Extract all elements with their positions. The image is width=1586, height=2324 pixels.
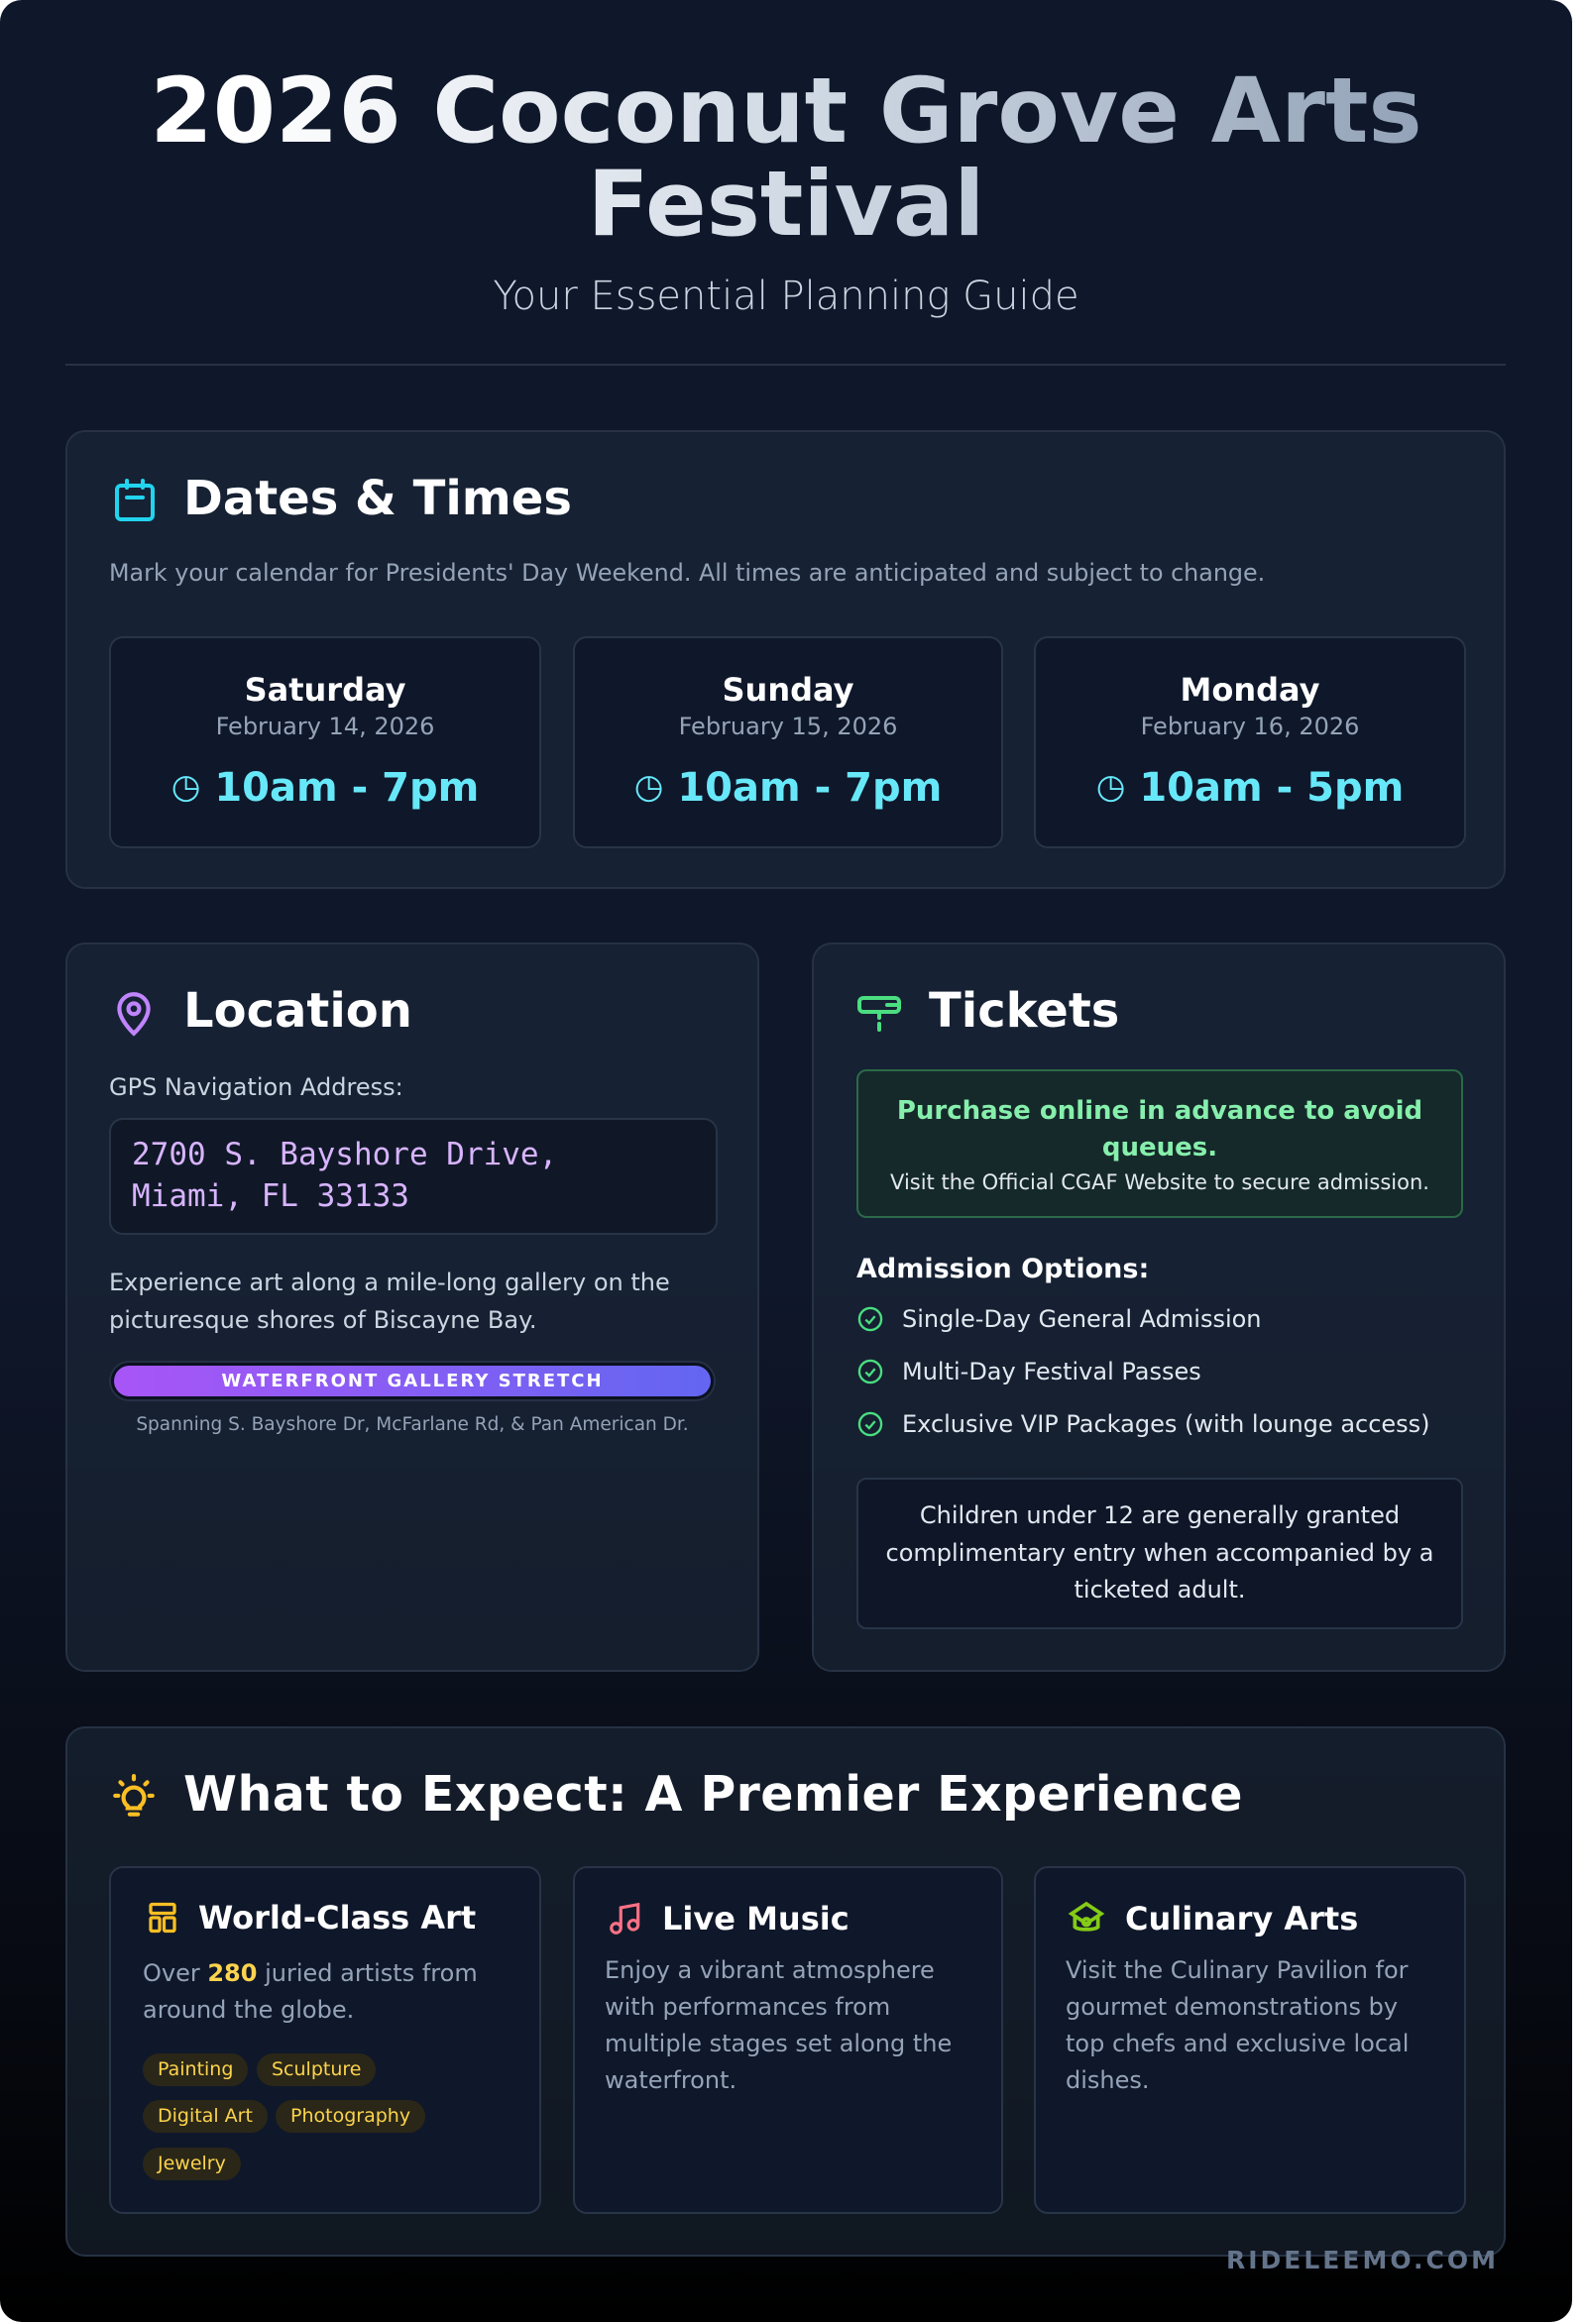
note: children	[856, 1478, 1463, 1629]
description: Experience art along a mile-long gallery on the picturesque shores of Biscayne Bay.	[109, 1269, 670, 1334]
day card: saturday: Saturday	[245, 671, 405, 709]
list item 3: Exclusive VIP Packages (with lounge access)	[902, 1410, 1430, 1438]
list item 1: Single-Day General Admission	[902, 1305, 1262, 1333]
heading: What to Expect: A Premier Experience	[183, 1766, 1243, 1823]
subheading: admission options: Admission Options:	[856, 1254, 1149, 1284]
address box: Miami, FL 33133	[132, 1178, 409, 1214]
day card: monday: February 16, 2026	[1141, 713, 1359, 740]
heading: Tickets	[929, 983, 1119, 1039]
address box	[109, 1118, 718, 1235]
card: world-class art: Jewelry	[158, 2153, 226, 2174]
panel: tickets	[812, 942, 1506, 1672]
card: world-class art: Over 280 juried artists from around the globe.	[143, 1959, 478, 2024]
card: world-class art: Sculpture	[272, 2058, 361, 2080]
caption: Spanning S. Bayshore Dr, McFarlane Rd, & Pan American Dr.	[136, 1414, 689, 1435]
day card: monday	[1034, 636, 1466, 848]
note: children: Children under 12 are generally granted complimentary entry when accompanied by a ticketed adult.	[886, 1501, 1433, 1604]
icon: ticket sign	[857, 996, 901, 1032]
callout: purchase online: Purchase online in advance to avoid queues.	[897, 1096, 1422, 1162]
watermark: RIDELEEMO.COM	[1226, 2246, 1499, 2274]
address box: 2700 S. Bayshore Drive,	[132, 1137, 557, 1172]
card: live music: Live Music	[662, 1900, 850, 1937]
heading: Dates & Times	[183, 471, 572, 526]
card: world-class art: Photography	[290, 2105, 410, 2127]
title: 2026 Coconut Grove Arts	[150, 59, 1422, 164]
day card: saturday: February 14, 2026	[216, 713, 434, 740]
day card: sunday: ◷ 10am - 7pm	[634, 765, 942, 811]
icon: calendar	[115, 479, 155, 521]
day card: sunday	[573, 636, 1003, 848]
day card: monday: ◷ 10am - 5pm	[1096, 765, 1404, 811]
title	[0, 65, 1572, 252]
tags: Painting	[158, 2058, 233, 2080]
subtitle: Your Essential Planning Guide	[493, 274, 1079, 319]
day card: sunday: February 15, 2026	[679, 713, 897, 740]
card: culinary arts: Culinary Arts	[1125, 1900, 1358, 1937]
description: Mark your calendar for Presidents' Day Weekend. All times are anticipated and subject to change.	[109, 559, 1265, 587]
day card: saturday	[109, 636, 541, 848]
list item 2: Multi-Day Festival Passes	[902, 1358, 1201, 1385]
panel: location	[65, 942, 759, 1672]
bar: waterfront gallery stretch: WATERFRONT GALLERY STRETCH	[221, 1371, 604, 1391]
card: world-class art: Digital Art	[158, 2105, 253, 2127]
panel: dates & times	[65, 430, 1506, 889]
title: Festival	[588, 153, 984, 257]
card: culinary arts	[1034, 1866, 1466, 2214]
card: live music: Enjoy a vibrant atmosphere with performances from multiple stages set along the waterfront.	[605, 1956, 952, 2094]
tags	[143, 2053, 248, 2086]
icon: bulb	[113, 1774, 155, 1817]
panel: what to expect	[65, 1726, 1506, 2257]
card: world-class art	[109, 1866, 541, 2214]
day card: sunday: Sunday	[722, 671, 853, 709]
callout: purchase online: Visit the Official CGAF Website to secure admission.	[890, 1170, 1429, 1194]
icon: pin	[117, 992, 151, 1037]
day card: monday: Monday	[1180, 671, 1319, 709]
bar: waterfront gallery stretch	[109, 1361, 716, 1401]
label: GPS Navigation Address:	[109, 1073, 403, 1101]
card heading: World-Class Art	[198, 1899, 476, 1937]
card: live music	[573, 1866, 1003, 2214]
day card: saturday: ◷ 10am - 7pm	[171, 765, 479, 811]
card: culinary arts: Visit the Culinary Pavilion for gourmet demonstrations by top chefs and exclusive local dishes.	[1066, 1956, 1409, 2094]
heading: Location	[183, 983, 412, 1039]
callout: purchase online	[856, 1069, 1463, 1218]
